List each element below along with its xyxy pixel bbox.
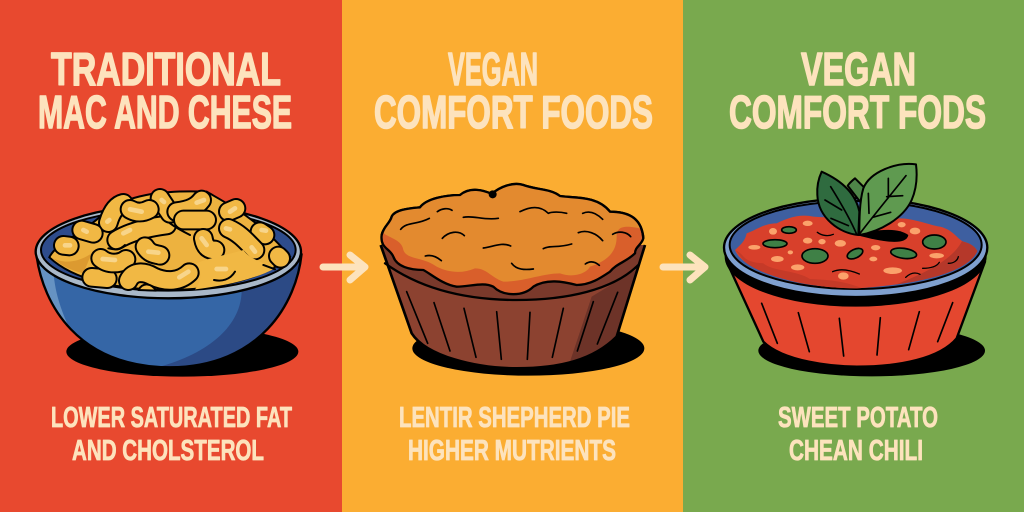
subtext: sweet potato chean chili: SWEET POTATO xyxy=(778,402,938,434)
subtext: lower saturated fat and cholesterol: LOWER SATURATED FAT xyxy=(51,402,292,434)
subtext: lentir shepherd pie higher mutrients xyxy=(399,402,630,467)
heading: vegan comfort foods: COMFORT FOODS xyxy=(374,86,653,138)
dish flutes xyxy=(407,292,618,359)
arrow: first to second panel xyxy=(323,255,365,280)
macaroni pieces xyxy=(63,198,281,291)
heading: vegan comfort foods: VEGAN xyxy=(448,43,538,95)
basil leaves xyxy=(817,164,917,235)
heading: vegan comfort foods xyxy=(374,43,653,138)
chili beans and spots xyxy=(748,221,958,280)
illustration: shepherd pie in brown dish xyxy=(380,180,647,376)
panel: sweet potato chili xyxy=(683,0,1024,512)
subtext: lower saturated fat and cholesterol: AND CHOLSTEROL xyxy=(72,435,264,467)
panel: lentil shepherd pie xyxy=(342,0,683,512)
heading: traditional mac and chese: MAC AND CHESE xyxy=(38,86,292,138)
panel: traditional mac and cheese xyxy=(34,52,303,461)
crust squiggles xyxy=(401,207,631,269)
heading: vegan comfort fods xyxy=(729,43,986,138)
subtext: lower saturated fat and cholesterol xyxy=(51,402,292,467)
heading: traditional mac and chese xyxy=(38,43,292,138)
subtext: sweet potato chean chili xyxy=(778,402,938,467)
illustration: blue bowl of macaroni xyxy=(36,191,307,377)
heading: traditional mac and chese: TRADITIONAL xyxy=(51,43,281,95)
bowl flutes xyxy=(762,303,953,356)
illustration: red bowl of chili with basil xyxy=(724,164,987,376)
subtext: sweet potato chean chili: CHEAN CHILI xyxy=(789,435,923,467)
subtext: lentir shepherd pie higher mutrients: HIGHER MUTRIENTS xyxy=(408,435,616,467)
heading: vegan comfort fods: VEGAN xyxy=(801,43,916,95)
subtext: lentir shepherd pie higher mutrients: LENTIR SHEPHERD PIE xyxy=(399,402,630,434)
arrow: second to third panel xyxy=(663,255,705,280)
